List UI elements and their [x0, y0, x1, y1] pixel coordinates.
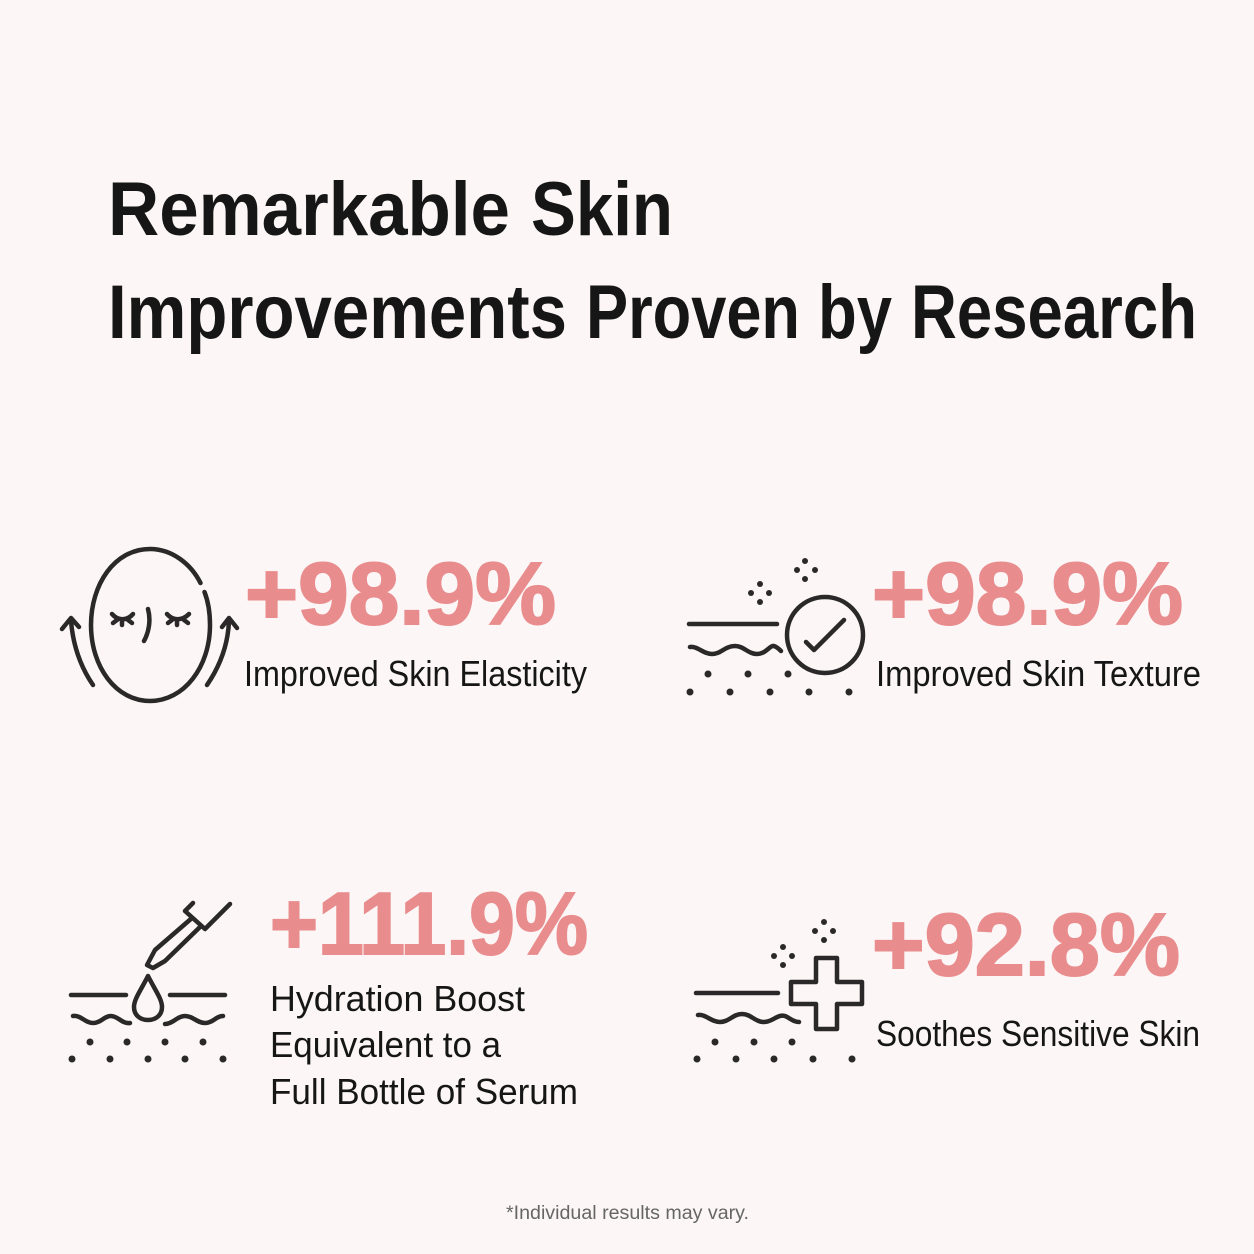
stat: soothing value: +92.8%: [872, 895, 1180, 994]
title: by: [818, 270, 892, 355]
panel: skin elasticity: [62, 544, 587, 701]
title: Skin: [531, 167, 673, 252]
icon: skin with cross: [694, 919, 862, 1062]
footnote: *Individual results may vary.: [506, 1203, 749, 1224]
label: hydration: [270, 978, 578, 1112]
panel: soothing: [694, 895, 1200, 1062]
icon: dropper and skin: [68, 903, 230, 1062]
title: Remarkable: [108, 167, 510, 252]
icon: face lift: [62, 549, 237, 701]
label: texture: Improved Skin Texture: [876, 653, 1201, 694]
label: hydration: Full Bottle of Serum: [270, 1071, 578, 1112]
stat: elasticity value: +98.9%: [245, 544, 556, 643]
stat: hydration value: +111.9%: [270, 874, 588, 973]
title: Proven: [586, 270, 800, 355]
label: hydration: Equivalent to a: [270, 1024, 502, 1065]
title: Research: [911, 270, 1197, 355]
label: elasticity: Improved Skin Elasticity: [244, 653, 587, 694]
title: [108, 167, 1197, 355]
label: hydration: Hydration Boost: [270, 978, 525, 1019]
panel: hydration: [68, 874, 588, 1112]
panel: skin texture: [686, 544, 1201, 696]
stat: texture value: +98.9%: [872, 544, 1183, 643]
icon: skin with check: [686, 558, 863, 696]
label: soothing: Soothes Sensitive Skin: [876, 1013, 1200, 1054]
title: Improvements: [108, 270, 567, 355]
